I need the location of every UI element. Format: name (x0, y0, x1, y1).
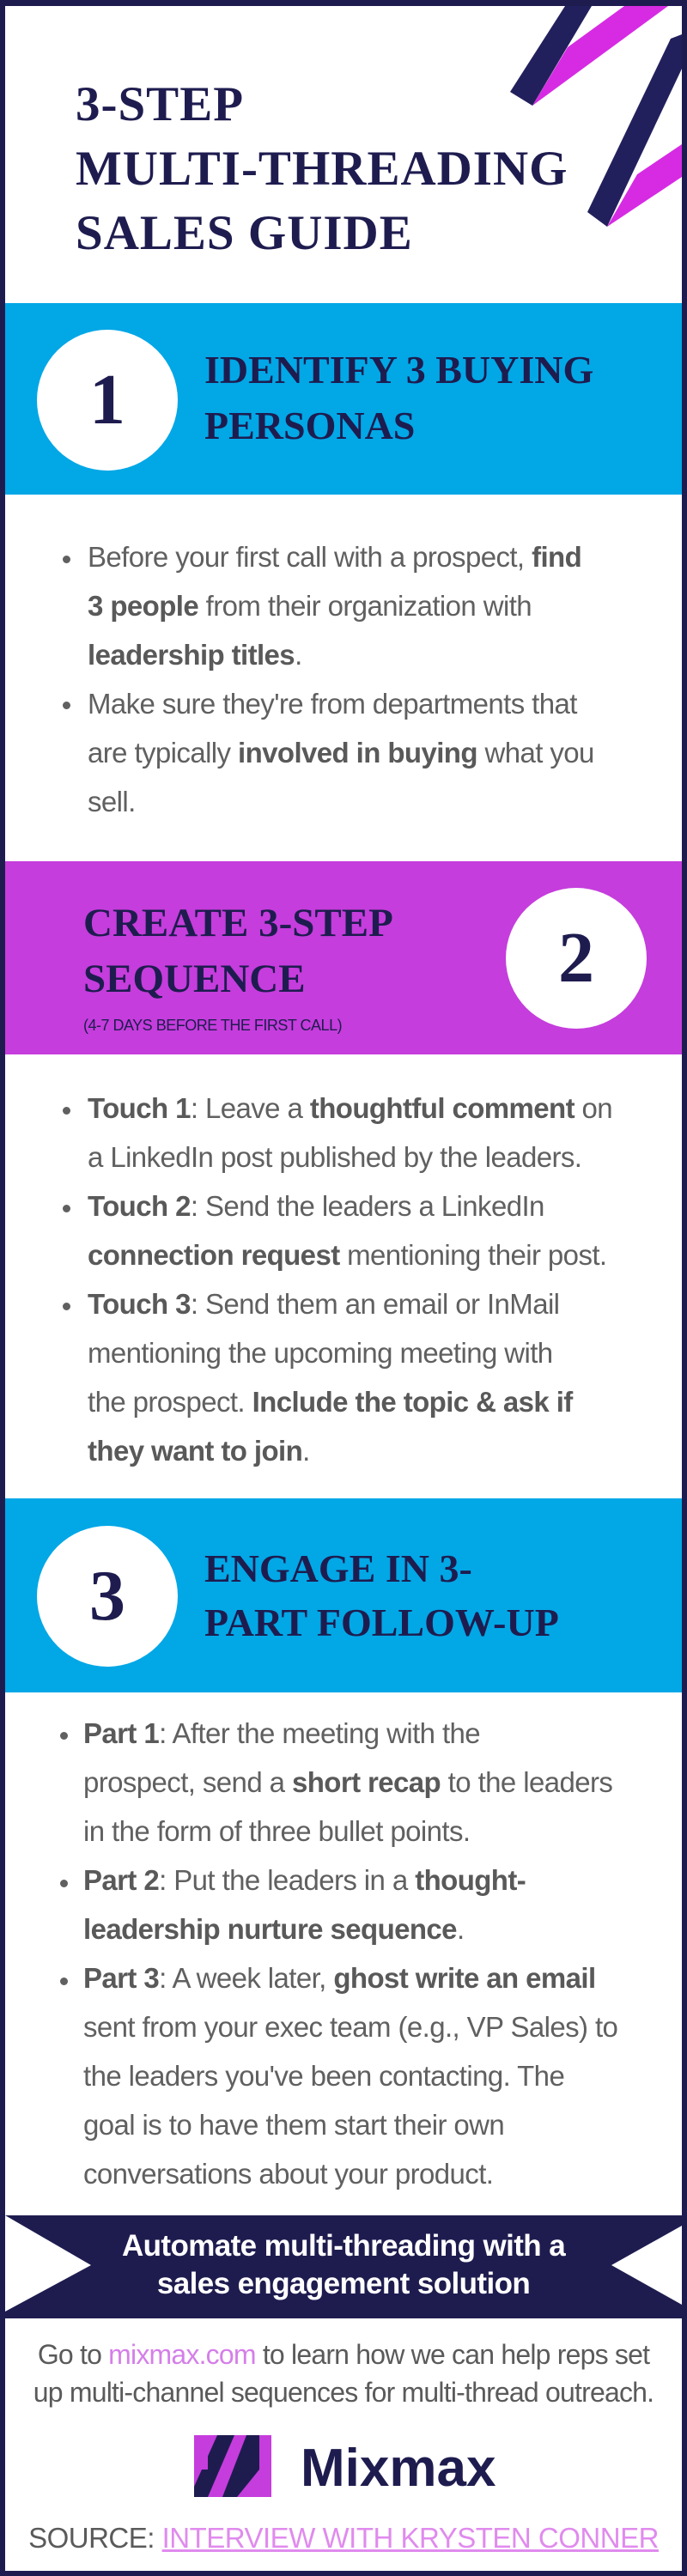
heading: step 3: PART FOLLOW-UP (204, 1601, 559, 1644)
icon: number 3: 3 (89, 1556, 125, 1636)
icon: number 1: 1 (89, 360, 125, 440)
text block: step 2 bullets: Touch 1: Leave a thoughtful comment on (88, 1092, 612, 1124)
heading: step 2: SEQUENCE (83, 957, 306, 1001)
title: SALES GUIDE (76, 206, 413, 260)
banner: call to action (5, 2215, 682, 2318)
text block: step 3 bullets: leadership nurture sequence. (83, 1913, 465, 1945)
text block: step 3 bullets: prospect, send a short recap to the leaders (83, 1766, 612, 1798)
icon: number 2 (506, 888, 647, 1029)
heading: step 3: ENGAGE IN 3- (204, 1546, 472, 1590)
text block: step 3 bullets (60, 1717, 617, 2190)
text block: step 3 bullets: goal is to have them start their own (83, 2109, 504, 2141)
text block: step 2 bullets: Touch 3: Send them an email or InMail (88, 1288, 559, 1320)
heading: step 2 (83, 901, 393, 1001)
heading: step 1 (204, 348, 593, 447)
text block: step 2 bullets: a LinkedIn post published by the leaders. (88, 1141, 581, 1173)
heading: step 3 (204, 1546, 559, 1644)
text block: step 3 bullets: conversations about your product. (83, 2158, 493, 2190)
text block: step 3 bullets: in the form of three bullet points. (83, 1815, 470, 1847)
heading: step 1: PERSONAS (204, 404, 415, 447)
panel: step 1 header (5, 303, 682, 495)
heading: step 1: IDENTIFY 3 BUYING (204, 348, 593, 392)
text block: go to mixmax: Go to mixmax.com to learn how we can help reps set (38, 2339, 649, 2370)
banner: call to action: Automate multi-threading with a (122, 2229, 565, 2263)
text block: step 2 bullets: they want to join. (88, 1435, 310, 1467)
title: 3-STEP (76, 77, 244, 131)
text block: step 3 bullets: Part 2: Put the leaders in a thought- (83, 1864, 526, 1896)
text block: step 1 bullets: 3 people from their organization with (88, 590, 532, 622)
text block: step 2 bullets (63, 1092, 612, 1467)
text block: step 3 bullets: Part 3: A week later, ghost write an email (83, 1962, 596, 1994)
text block: step 2 bullets: the prospect. Include the topic & ask if (88, 1386, 573, 1418)
logo: Mixmax (194, 2435, 495, 2498)
icon: number 2: 2 (558, 918, 594, 998)
title (76, 77, 568, 260)
text block: step 1 bullets (63, 541, 594, 817)
text block: step 1 bullets: leadership titles. (88, 639, 302, 671)
heading: step 2: CREATE 3-STEP (83, 901, 393, 945)
text block: step 1 bullets: Before your first call with a prospect, find (88, 541, 581, 573)
source line: SOURCE: INTERVIEW WITH KRYSTEN CONNER (28, 2522, 659, 2554)
banner: call to action: sales engagement solution (157, 2267, 530, 2300)
decorative stripes (510, 6, 682, 227)
icon: number 1 (37, 330, 178, 471)
panel: step 3 header (5, 1498, 682, 1692)
text block: step 1 bullets: are typically involved in buying what you (88, 737, 594, 769)
text block: go to mixmax (33, 2339, 654, 2408)
text block: step 2 bullets: mentioning the upcoming meeting with (88, 1337, 553, 1369)
subtitle: timing: (4-7 DAYS BEFORE THE FIRST CALL) (83, 1017, 342, 1034)
text block: step 2 bullets: connection request mentioning their post. (88, 1239, 606, 1271)
text block: step 3 bullets: sent from your exec team (e.g., VP Sales) to (83, 2011, 617, 2043)
text block: go to mixmax: up multi-channel sequences for multi-thread outreach. (33, 2377, 654, 2408)
logo: Mixmax: Mixmax (301, 2439, 495, 2498)
text block: step 1 bullets: sell. (88, 786, 136, 817)
text block: step 3 bullets: the leaders you've been contacting. The (83, 2060, 564, 2092)
text block: step 1 bullets: Make sure they're from departments that (88, 688, 577, 720)
text block: step 3 bullets: Part 1: After the meeting with the (83, 1717, 480, 1749)
title: MULTI-THREADING (76, 142, 568, 196)
icon: number 3 (37, 1526, 178, 1667)
panel: step 2 header (5, 861, 682, 1054)
text block: step 2 bullets: Touch 2: Send the leaders a LinkedIn (88, 1190, 544, 1222)
